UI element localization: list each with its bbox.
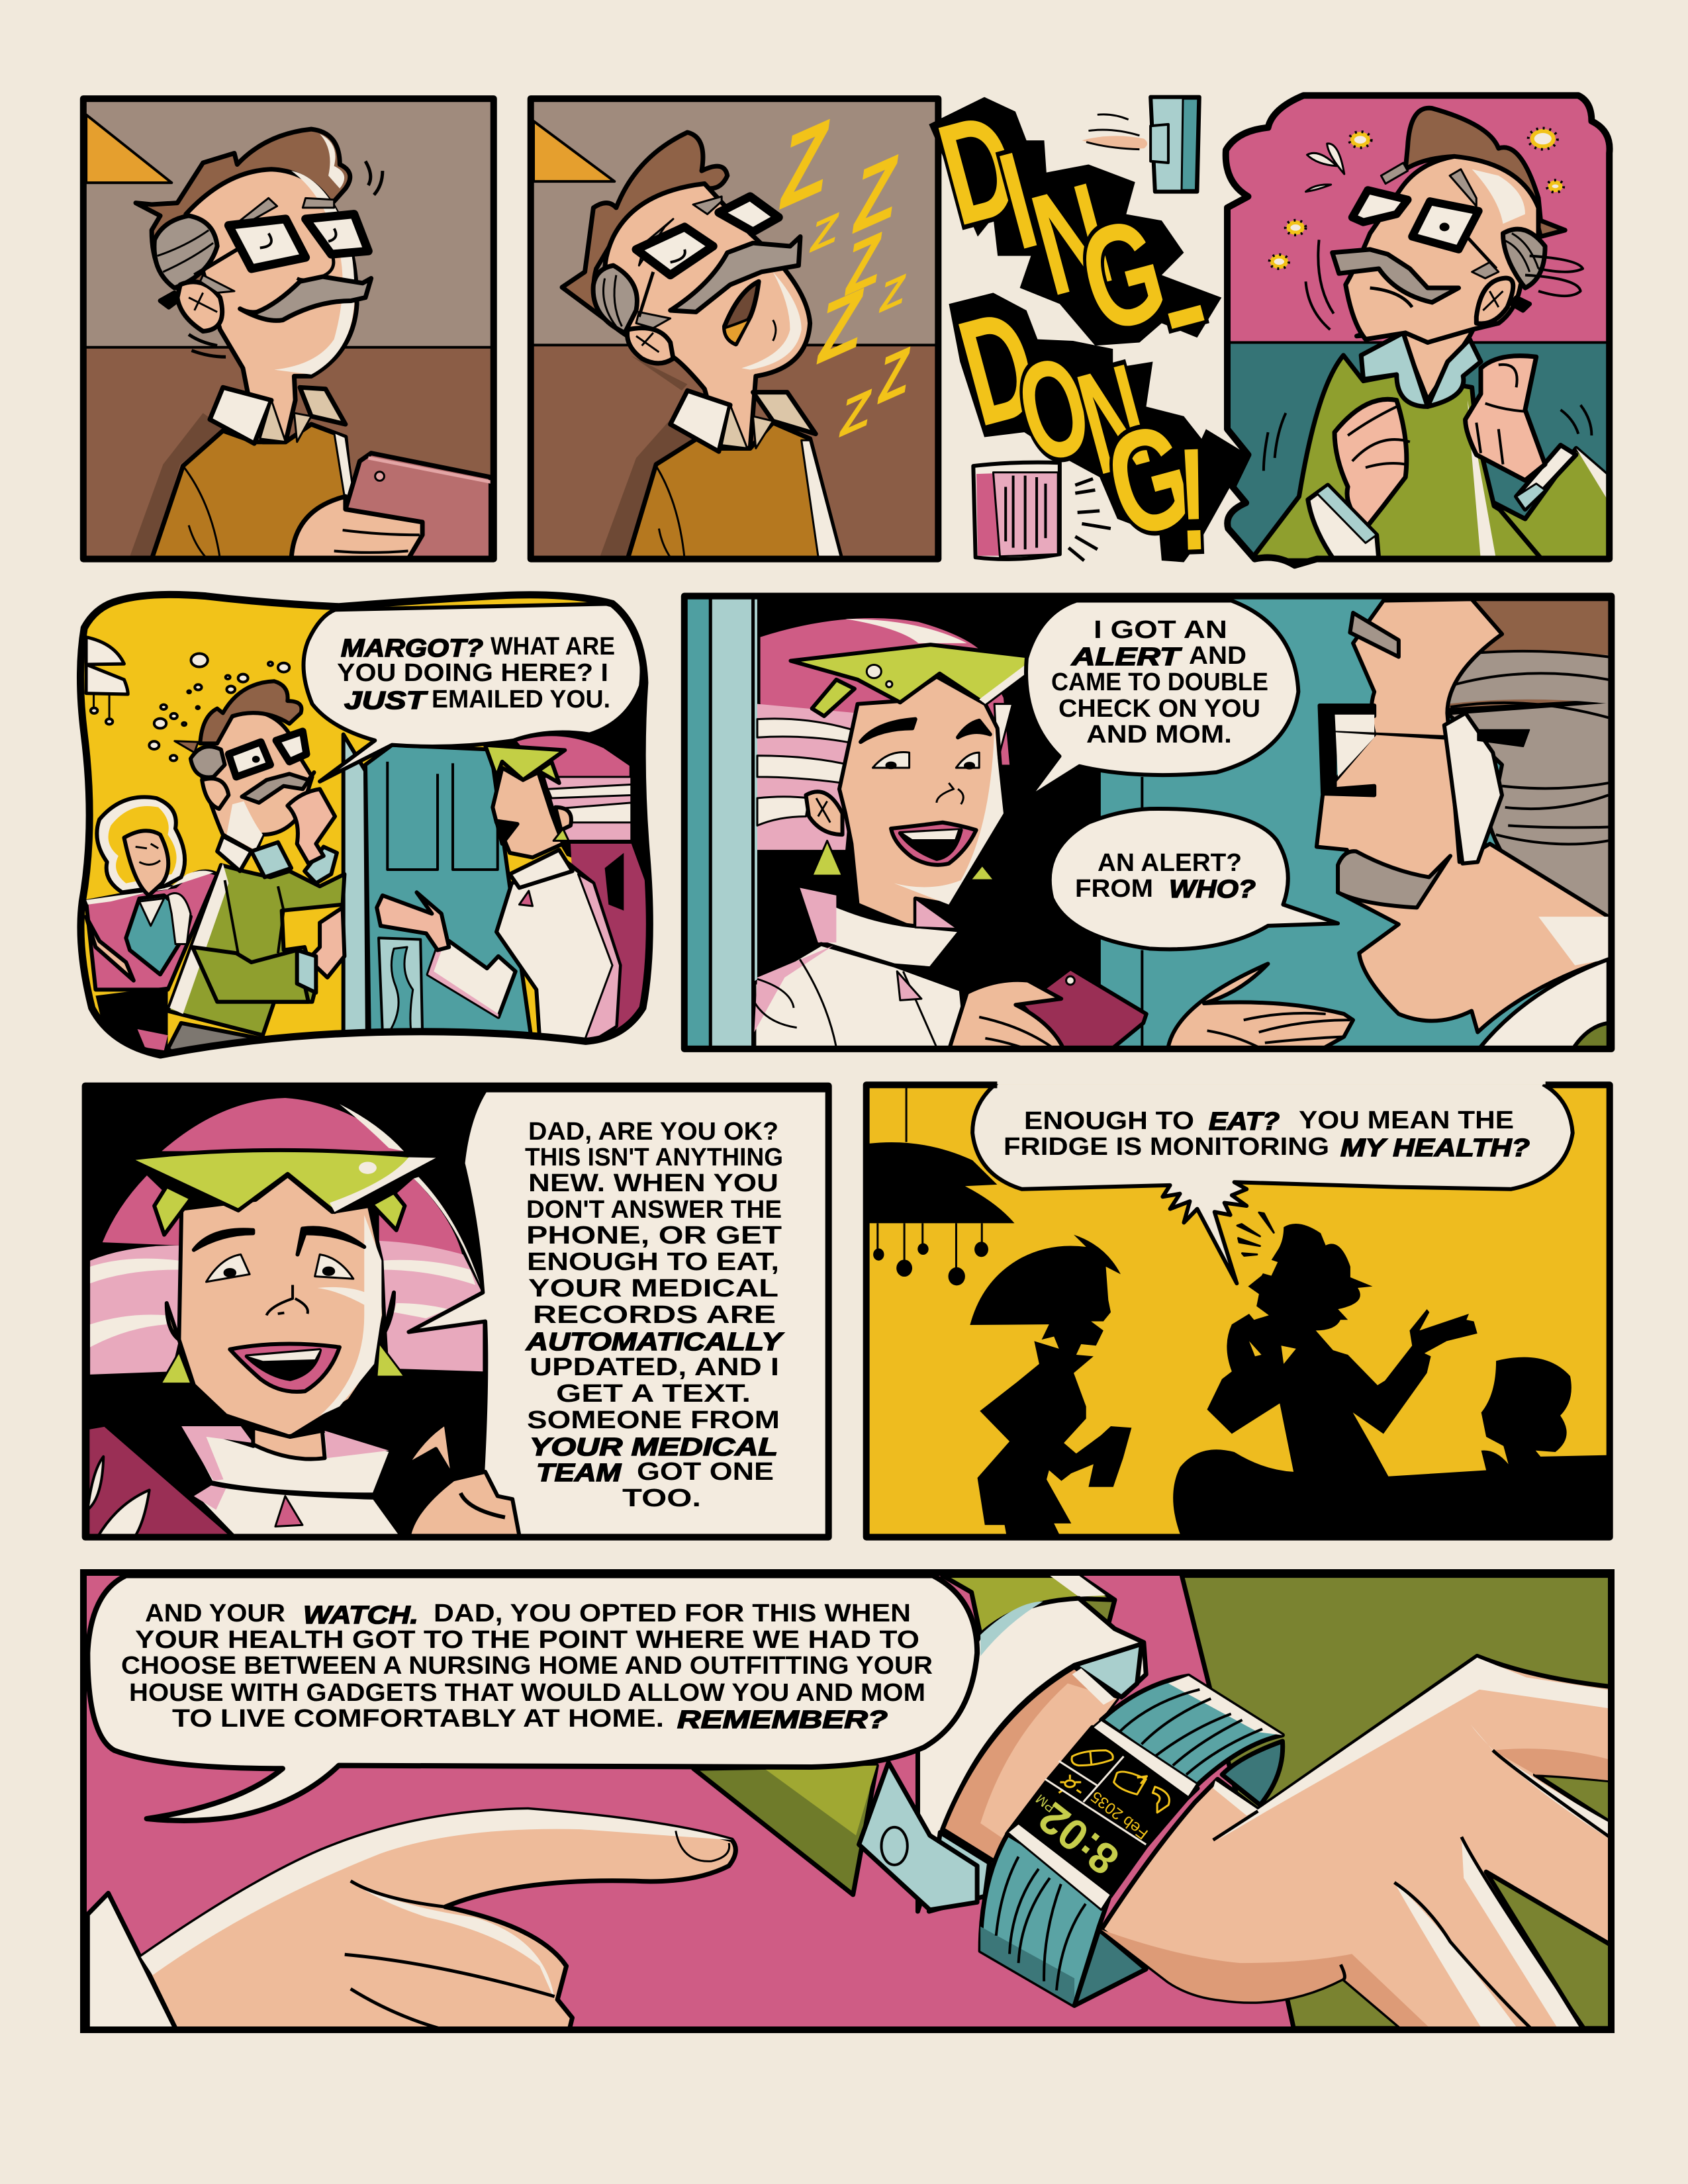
speech bubble text: and your watch: REMEMBER? xyxy=(677,1706,888,1734)
speech bubble text: enough to eat xyxy=(1004,1107,1530,1162)
speech bubble text: Dad, are you ok: PHONE, OR GET xyxy=(526,1222,782,1250)
speech bubble text: I got an alert: AND xyxy=(1189,642,1246,670)
panel: man reading tablet xyxy=(83,99,494,559)
speech bubble text: an alert from who: WHO? xyxy=(1169,876,1256,903)
sound effect: DING-DONG!: D xyxy=(924,82,1033,257)
speech bubble text: I got an alert xyxy=(1051,616,1268,749)
speech bubble text: Dad, are you ok: TOO. xyxy=(622,1484,701,1512)
speech bubble text: and your watch: HOUSE WITH GADGETS THAT WOULD ALLOW YOU AND MOM xyxy=(129,1679,925,1707)
watch screen icons xyxy=(1045,1751,1169,1844)
panel: doorway scene xyxy=(73,582,669,1059)
watch display text: 8:02 xyxy=(1029,1794,1127,1885)
speech bubble text: I got an alert: CAME TO DOUBLE xyxy=(1051,668,1268,696)
sound effect: snoring Z letters: Z xyxy=(809,204,839,261)
speech bubble text: Dad, are you ok: GET A TEXT. xyxy=(556,1380,751,1408)
speech bubble text: and your watch: DAD, YOU OPTED FOR THIS WHEN xyxy=(434,1600,911,1627)
sound effect: snoring Z letters: Z xyxy=(839,378,872,448)
sound effect: DING-DONG! xyxy=(924,82,1248,582)
sound effect: snoring Z letters: Z xyxy=(844,217,882,312)
speech bubble text: Margot question: JUST xyxy=(344,687,428,715)
speech bubble text: and your watch: CHOOSE BETWEEN A NURSING HOME AND OUTFITTING YOUR xyxy=(121,1652,933,1680)
panel: smartwatch close-up xyxy=(83,1572,1616,2039)
sound effect: snoring Z letters: Z xyxy=(878,265,907,322)
speech bubble text: enough to eat: YOU MEAN THE xyxy=(1299,1107,1514,1134)
speech bubble text: I got an alert: ALERT xyxy=(1071,643,1182,671)
panel: startled man xyxy=(1219,92,1618,567)
sound effect: DING-DONG!: O xyxy=(1003,326,1105,492)
shoulder and torso xyxy=(1182,1576,1611,2028)
speech bubble text: enough to eat: MY HEALTH? xyxy=(1340,1134,1530,1162)
speech bubble text: Margot question: YOU DOING HERE? I xyxy=(337,659,608,687)
speech bubble text: Margot question: WHAT ARE xyxy=(491,633,615,660)
speech bubble text: Dad, are you ok: NEW. WHEN YOU xyxy=(528,1169,778,1197)
sound effect: snoring Z letters: Z xyxy=(816,271,865,382)
speech bubble text: Dad, are you ok: GOT ONE xyxy=(637,1458,774,1486)
speech bubble text: Margot question: MARGOT? xyxy=(341,635,483,662)
sound effect: snoring Z letters: Z xyxy=(877,333,910,418)
icon: mug with vibration lines xyxy=(973,463,1111,561)
speech bubble text: Dad, are you ok: TEAM xyxy=(536,1459,622,1487)
icon: doorbell button with finger xyxy=(1082,97,1199,192)
speech bubble text: I got an alert: I GOT AN xyxy=(1094,616,1227,644)
speech bubble text: Dad, are you ok: RECORDS ARE xyxy=(533,1301,776,1329)
speech bubble text: and your watch: TO LIVE COMFORTABLY AT HOME. xyxy=(172,1705,664,1733)
speech bubble text: enough to eat: EAT? xyxy=(1209,1108,1280,1136)
sound effect: snoring Z letters xyxy=(779,98,910,448)
speech bubble text: Dad, are you ok: THIS ISN'T ANYTHING xyxy=(525,1144,783,1171)
speech bubble text: Margot question: EMAILED YOU. xyxy=(432,686,610,713)
speech bubble text: and your watch: WATCH. xyxy=(303,1602,418,1629)
speech bubble text: Dad, are you ok: DAD, ARE YOU OK? xyxy=(528,1118,778,1146)
speech bubble text: I got an alert: AND MOM. xyxy=(1086,721,1232,749)
speech bubble text: and your watch: AND YOUR xyxy=(145,1600,285,1627)
speech bubble text: an alert from who xyxy=(1075,849,1256,903)
speech bubble text: Dad, are you ok: AUTOMATICALLY xyxy=(526,1328,784,1356)
speech bubble text: and your watch xyxy=(121,1600,933,1734)
sound effect: snoring Z letters: Z xyxy=(852,136,899,252)
speech bubble text: and your watch: YOUR HEALTH GOT TO THE POINT WHERE WE HAD TO xyxy=(135,1626,919,1654)
panel: man asleep xyxy=(531,99,938,560)
panel: Margot explains xyxy=(85,1086,829,1539)
speech bubble text: enough to eat: ENOUGH TO xyxy=(1024,1107,1194,1135)
sound effect: DING-DONG!: G xyxy=(1092,391,1207,569)
speech bubble text: Dad, are you ok: YOUR MEDICAL xyxy=(530,1433,778,1461)
panel: silhouettes xyxy=(867,1083,1610,1540)
sound effect: DING-DONG!: - xyxy=(1143,229,1224,383)
speech bubble text: I got an alert: CHECK ON YOU xyxy=(1058,695,1260,723)
speech bubble text: Dad, are you ok: DON'T ANSWER THE xyxy=(526,1196,782,1224)
forearm xyxy=(943,1666,1117,1861)
sound effect: DING-DONG!: N xyxy=(1064,332,1163,505)
sound effect: DING-DONG!: G xyxy=(1065,186,1181,363)
sleeve and cuff xyxy=(694,1766,876,1895)
speech bubble text: Margot question xyxy=(337,633,615,715)
speech bubble text: an alert from who: AN ALERT? xyxy=(1098,849,1242,877)
watch display text: PM xyxy=(1033,1791,1058,1815)
pointing hand xyxy=(87,1809,735,2030)
sound effect: snoring Z letters: Z xyxy=(779,98,830,232)
speech bubble text: Dad, are you ok: SOMEONE FROM xyxy=(527,1406,780,1434)
sound effect: DING-DONG!: I xyxy=(986,123,1051,279)
speech bubble text: Dad, are you ok xyxy=(525,1118,784,1512)
speech bubble text: Dad, are you ok: YOUR MEDICAL xyxy=(528,1275,778,1302)
black silhouette behind letters xyxy=(929,97,1248,562)
watch band xyxy=(980,1676,1283,2005)
sound effect: DING-DONG!: D xyxy=(944,277,1053,459)
wrist and hand xyxy=(1102,1656,1616,2039)
speech bubble text: Dad, are you ok: ENOUGH TO EAT, xyxy=(527,1248,779,1276)
sound effect: DING-DONG!: N xyxy=(1017,152,1126,327)
speech bubble text: Dad, are you ok: UPDATED, AND I xyxy=(530,1353,779,1381)
watch display text: Feb 2035 xyxy=(1088,1788,1152,1843)
speech bubble xyxy=(87,1576,977,1821)
panel: Margot and father close-up xyxy=(684,596,1611,1050)
speech bubble text: an alert from who: FROM xyxy=(1075,875,1153,903)
speech bubble text: enough to eat: FRIDGE IS MONITORING xyxy=(1004,1133,1329,1161)
sound effect: DING-DONG!: ! xyxy=(1175,418,1211,582)
